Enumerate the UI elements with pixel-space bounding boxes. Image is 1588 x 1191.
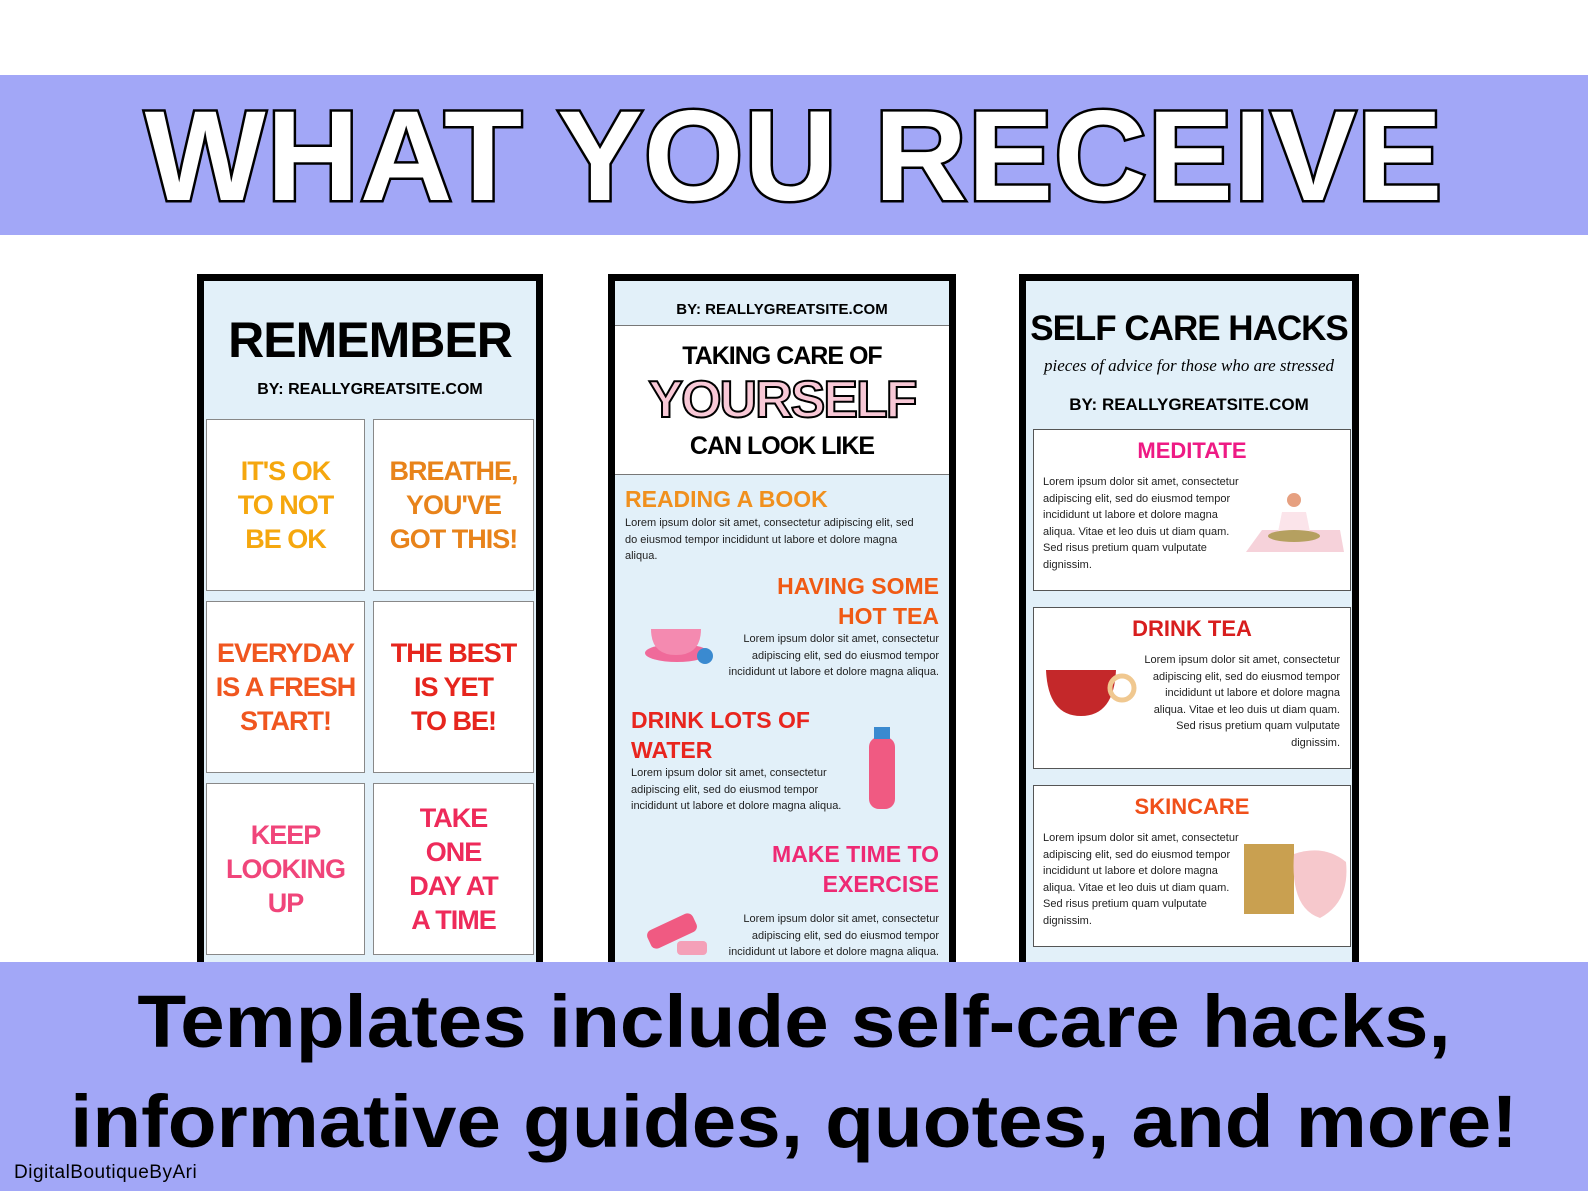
heading: SELF CARE HACKS: [1030, 309, 1348, 348]
title: WHAT YOU RECEIVE: [145, 85, 1443, 228]
quote cells: YOU'VE: [406, 490, 501, 520]
icon: dumbbells: [647, 913, 707, 955]
panel: taking care of yourself: [608, 274, 956, 964]
quote cells: BREATHE,: [389, 456, 518, 486]
quote cells: IS YET: [414, 672, 493, 702]
quote cells: DAY AT: [409, 871, 498, 901]
quote cells: A TIME: [411, 905, 496, 935]
byline: BY: REALLYGREATSITE.COM: [1069, 395, 1309, 414]
bottom band: [0, 962, 1588, 1191]
card tea: [1033, 607, 1351, 769]
card meditate: [1033, 429, 1351, 591]
quote cells: THE BEST: [391, 638, 516, 668]
section water: Lorem ipsum dolor sit amet, consectetur adipiscing elit, sed do eiusmod tempor incididunt ut labore et dolore magna aliqua.: [631, 767, 841, 812]
quote cells: BE OK: [245, 524, 326, 554]
top band: [0, 75, 1588, 235]
caption: informative guides, quotes, and more!: [70, 1080, 1518, 1163]
caption: Templates include self-care hacks,: [137, 980, 1451, 1063]
card meditate: Lorem ipsum dolor sit amet, consectetur adipiscing elit, sed do eiusmod tempor incididunt ut labore et dolore magna aliqua. Vitae et leo duis ut diam quam. Sed risus pretium quam vulputate dignissim.: [1043, 476, 1239, 570]
card meditate: MEDITATE: [1137, 438, 1247, 463]
header white: CAN LOOK LIKE: [690, 432, 874, 460]
quote cells: IS A FRESH: [216, 672, 355, 702]
quote cells: EVERYDAY: [217, 638, 354, 668]
quote cells: IT'S OK: [241, 456, 330, 486]
section reading: [625, 486, 914, 562]
section water: [631, 707, 841, 812]
section water: WATER: [631, 737, 712, 763]
section tea: HOT TEA: [838, 603, 939, 629]
quote cells: GOT THIS!: [390, 524, 517, 554]
card skincare: Lorem ipsum dolor sit amet, consectetur adipiscing elit, sed do eiusmod tempor incididunt ut labore et dolore magna aliqua. Vitae et leo duis ut diam quam. Sed risus pretium quam vulputate dignissim.: [1043, 832, 1239, 926]
icon: teacup: [645, 629, 713, 664]
quote cells: ONE: [426, 837, 481, 867]
subtitle: pieces of advice for those who are stressed: [1044, 356, 1334, 375]
section reading: Lorem ipsum dolor sit amet, consectetur adipiscing elit, sed do eiusmod tempor incididunt ut labore et dolore magna aliqua.: [625, 517, 914, 562]
caption: [70, 980, 1518, 1163]
byline: BY: REALLYGREATSITE.COM: [676, 301, 888, 318]
section water: DRINK LOTS OF: [631, 707, 810, 733]
section exercise: [729, 841, 939, 958]
panel: self care hacks: [1019, 274, 1359, 964]
quote cells: TAKE: [420, 803, 487, 833]
header white: [615, 325, 949, 475]
quote cells: UP: [268, 888, 303, 918]
card tea: DRINK TEA: [1132, 616, 1252, 641]
quote cells: START!: [240, 706, 331, 736]
byline: BY: REALLYGREATSITE.COM: [257, 381, 483, 398]
section tea: [729, 573, 939, 678]
section exercise: MAKE TIME TO: [772, 841, 939, 867]
card skincare: SKINCARE: [1135, 794, 1249, 819]
icon: bottle: [869, 727, 895, 809]
section exercise: Lorem ipsum dolor sit amet, consectetur adipiscing elit, sed do eiusmod tempor incididunt ut labore et dolore magna aliqua.: [729, 913, 939, 958]
quote cells: [206, 419, 534, 955]
section exercise: EXERCISE: [823, 871, 939, 897]
quote cells: TO NOT: [238, 490, 333, 520]
quote cells: TO BE!: [411, 706, 496, 736]
quote cells: LOOKING: [226, 854, 345, 884]
card skincare: [1033, 785, 1351, 947]
footer credit: DigitalBoutiqueByAri: [14, 1162, 197, 1183]
card tea: Lorem ipsum dolor sit amet, consectetur adipiscing elit, sed do eiusmod tempor incididunt ut labore et dolore magna aliqua. Vitae et leo duis ut diam quam. Sed risus pretium quam vulputate dignissim.: [1144, 654, 1340, 748]
section tea: HAVING SOME: [777, 573, 939, 599]
heading remember: REMEMBER: [228, 312, 512, 368]
header white: TAKING CARE OF: [682, 342, 882, 370]
section tea: Lorem ipsum dolor sit amet, consectetur adipiscing elit, sed do eiusmod tempor incididunt ut labore et dolore magna aliqua.: [729, 633, 939, 678]
section reading: READING A BOOK: [625, 486, 828, 512]
header white: YOURSELF: [648, 371, 916, 429]
panel: remember: [197, 274, 543, 964]
quote cells: KEEP: [251, 820, 320, 850]
